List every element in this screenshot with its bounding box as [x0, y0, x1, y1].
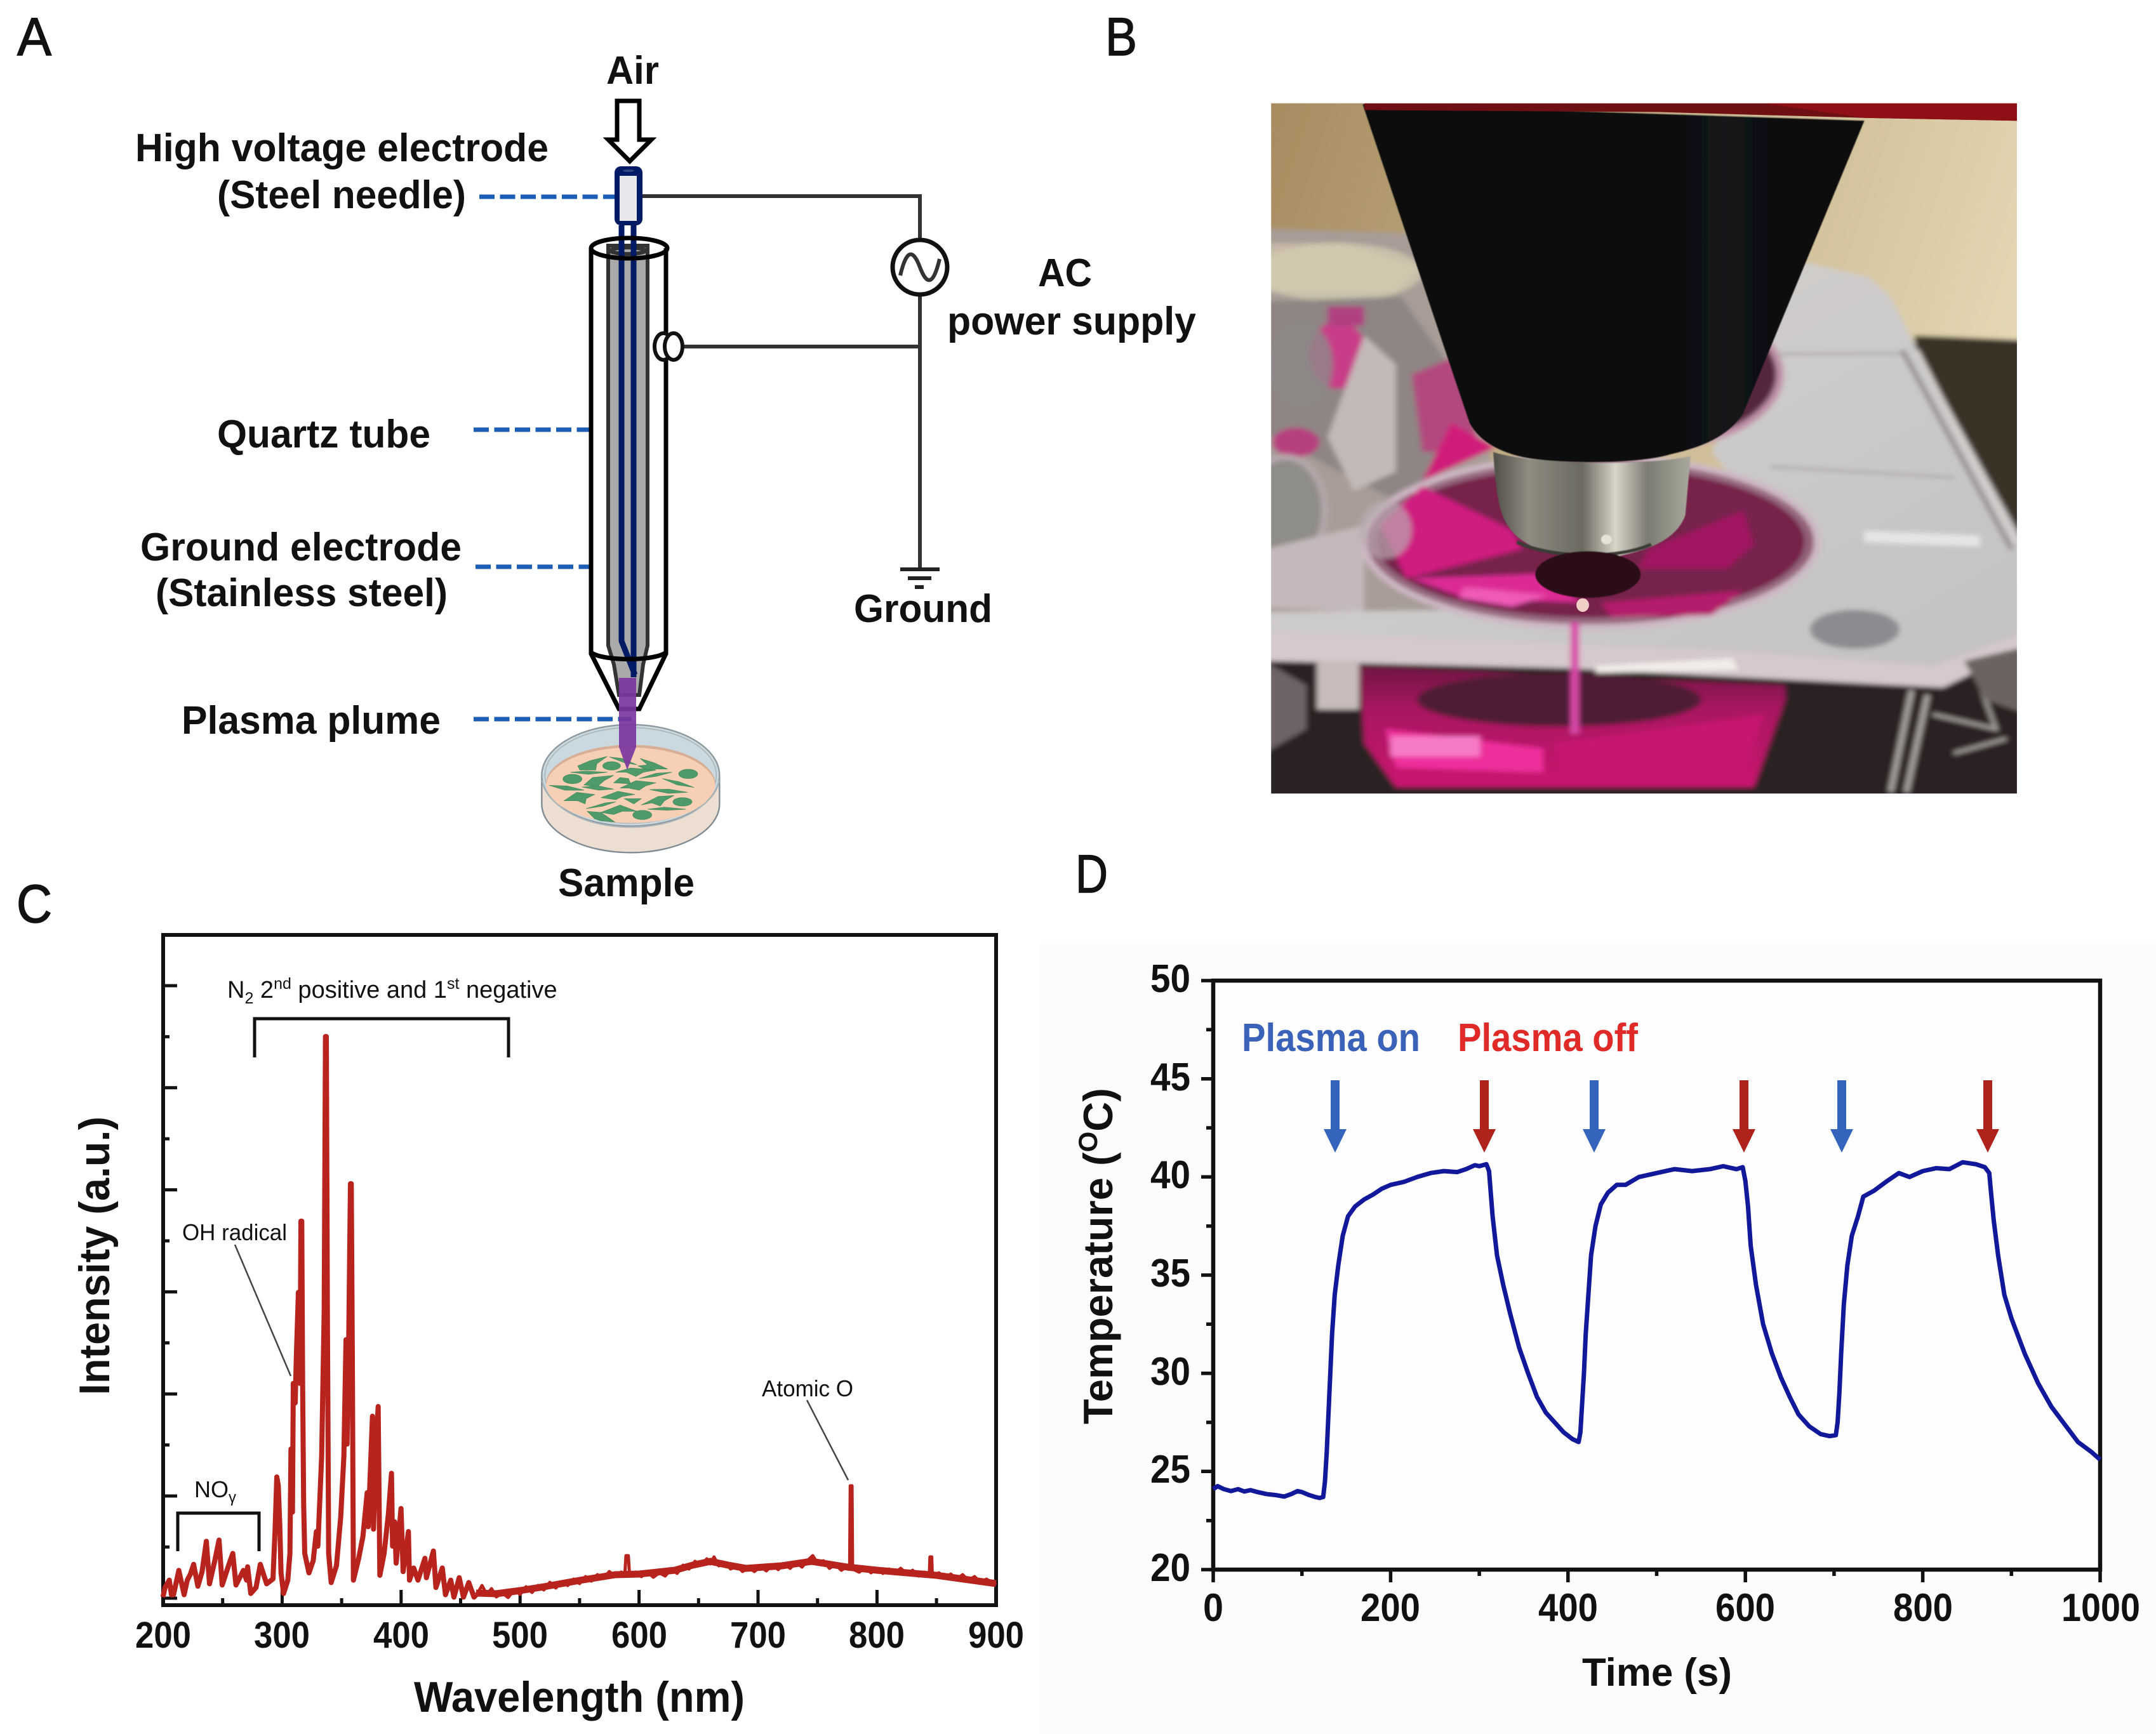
label: AC power supply: [947, 251, 1197, 343]
x tick labels: 200: [135, 1615, 191, 1656]
arrow: air inlet: [608, 101, 651, 161]
spectrum line: 465-900 nm: [476, 1486, 996, 1598]
annotation: N2 bands: 2: [244, 989, 253, 1007]
annotation: N2 bands: 2: [253, 977, 274, 1003]
label: ground electrode: [140, 526, 462, 615]
tube rims: [591, 238, 667, 258]
panel letter A: A: [17, 7, 51, 67]
red top edge: [1364, 103, 2017, 121]
annotation: N2 bands: N: [227, 977, 244, 1003]
spectrum line: 200-465 nm: [163, 1036, 476, 1597]
x tick labels: 900: [968, 1615, 1024, 1656]
panel A: plasma jet schematic: [17, 7, 1197, 905]
x tick labels: [1203, 1586, 2140, 1630]
x tick labels: 400: [373, 1615, 429, 1656]
panel letter D: D: [1075, 844, 1108, 904]
x tick labels: 500: [492, 1615, 548, 1656]
petri dish with cells: [542, 725, 719, 852]
icon: AC source: [893, 240, 947, 295]
annotation: N2 bands: [227, 975, 557, 1057]
y axis title: O: [1073, 1132, 1103, 1152]
x tick labels: 800: [849, 1615, 905, 1656]
axis ticks: [163, 986, 936, 1605]
y tick labels: 30: [1150, 1350, 1190, 1394]
temperature curve: [1213, 1162, 2100, 1498]
annotation: N2 bands: st: [447, 975, 459, 993]
plasma plume: [619, 678, 636, 770]
legend: plasma off: Plasma off: [1458, 1016, 1638, 1060]
annotation: NO gamma: [178, 1476, 259, 1551]
x tick labels: 600: [611, 1615, 667, 1656]
x axis title: Time (s): [1582, 1651, 1732, 1695]
y tick labels: 40: [1150, 1153, 1190, 1197]
y axis title: Temperature (: [1075, 1152, 1121, 1424]
leader lines: [474, 197, 632, 719]
label: plasma plume: Plasma plume: [182, 699, 441, 743]
arrows: plasma off: [1473, 1080, 1999, 1153]
panel letter C: C: [17, 874, 52, 934]
annotation: atomic O: Atomic O: [762, 1375, 853, 1401]
needle head: [615, 166, 642, 225]
chart frame: [163, 935, 996, 1605]
panel D: temperature over time: [1073, 844, 2140, 1695]
annotation: OH radical: OH radical: [182, 1219, 287, 1245]
label: ground electrode: (Stainless steel): [156, 571, 448, 615]
panel background: chart D backdrop: [1039, 944, 2156, 1734]
plasma glow: [1576, 599, 1589, 612]
x tick labels: 700: [730, 1615, 786, 1656]
label: ground: Ground: [854, 587, 992, 631]
chart frame: [1213, 981, 2100, 1570]
label: quartz tube: Quartz tube: [217, 413, 430, 456]
x tick labels: 600: [1715, 1586, 1775, 1630]
label: AC power supply: AC: [1038, 251, 1092, 295]
axis ticks: [1201, 981, 2100, 1582]
label: sample: Sample: [558, 861, 695, 905]
label: AC power supply: power supply: [947, 300, 1197, 343]
legend: plasma on: Plasma on: [1242, 1016, 1420, 1060]
icon: ground electrode clamp: [655, 333, 682, 360]
y tick labels: [1150, 957, 1190, 1590]
photo scene: [1246, 98, 2028, 802]
y tick labels: 20: [1150, 1546, 1190, 1590]
annotation: OH radical: [182, 1219, 291, 1376]
annotation: atomic O: [762, 1375, 853, 1480]
panel B: photograph of plasma jet over well plate: [1105, 7, 2028, 802]
label: high voltage electrode: [135, 126, 549, 217]
panel letter B: B: [1105, 7, 1137, 67]
annotation: NO gamma: NO: [194, 1476, 229, 1502]
label: high voltage electrode: High voltage electrode: [135, 126, 549, 170]
y axis title: Intensity (a.u.): [70, 1116, 119, 1395]
cultured cells: [549, 757, 698, 822]
circuit wiring: [642, 196, 920, 569]
ground electrode sleeve: [608, 246, 648, 695]
x tick labels: [135, 1615, 1024, 1656]
annotation: N2 bands: negative: [459, 977, 557, 1003]
annotation: N2 bands: nd: [274, 975, 291, 993]
x tick labels: 200: [1361, 1586, 1420, 1630]
outer tube: [591, 248, 666, 709]
needle shaft: [622, 225, 635, 675]
x axis title: Wavelength (nm): [414, 1673, 745, 1721]
label: ground electrode: Ground electrode: [140, 526, 462, 569]
y tick labels: 50: [1150, 957, 1190, 1001]
x tick labels: 400: [1538, 1586, 1598, 1630]
annotation: NO gamma: γ: [229, 1489, 236, 1506]
x tick labels: 800: [1893, 1586, 1953, 1630]
x tick labels: 1000: [2061, 1586, 2140, 1630]
x tick labels: 300: [254, 1615, 310, 1656]
arrows: plasma on: [1324, 1080, 1853, 1153]
label: high voltage electrode: (Steel needle): [217, 173, 466, 217]
y tick labels: 35: [1150, 1252, 1190, 1295]
y axis title: C): [1075, 1088, 1121, 1132]
annotation: N2 bands: positive and 1: [291, 977, 447, 1003]
label: Air: Air: [606, 49, 659, 93]
spectrum baseline band: 465-900 nm: [476, 1561, 996, 1594]
jet nozzle: [1362, 104, 1865, 598]
icon: ground symbol: [900, 569, 940, 587]
panel C: emission spectrum: [17, 874, 1024, 1721]
quartz tube and needle assembly: [591, 166, 667, 709]
y tick labels: 45: [1150, 1056, 1190, 1099]
x tick labels: 0: [1203, 1586, 1223, 1630]
y tick labels: 25: [1150, 1448, 1190, 1492]
